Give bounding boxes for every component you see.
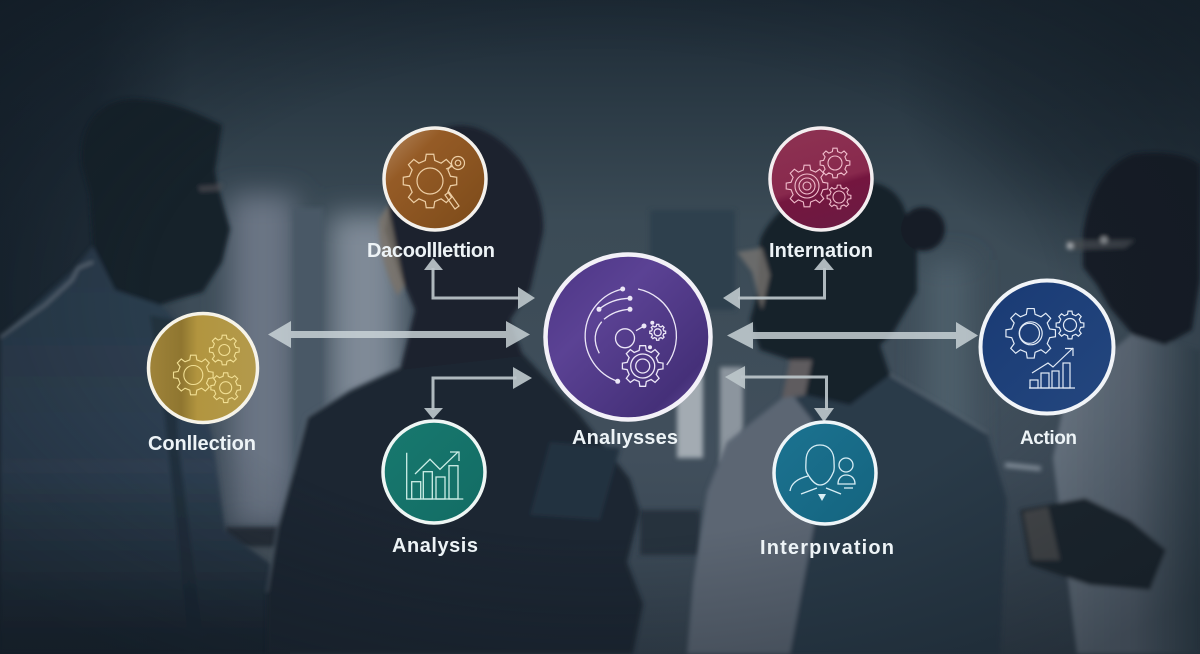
icon: three gold gears xyxy=(174,335,241,403)
label: action: Action xyxy=(1020,428,1077,449)
arrow: elbow between data collection and analyses xyxy=(424,258,535,309)
node: data collection (orange) xyxy=(384,128,486,230)
arrow: elbow between analysis and analyses xyxy=(424,367,532,419)
icon: three gears xyxy=(786,148,851,209)
person 3 silhouette xyxy=(687,181,1007,654)
node: internation (crimson) xyxy=(770,128,872,230)
arrow: long double arrow right of centre xyxy=(727,322,978,349)
label: internation: Internation xyxy=(769,240,873,262)
label: analyses: Analıysses xyxy=(572,427,678,449)
person 1 silhouette xyxy=(0,99,272,654)
icon: cycle arcs with gears xyxy=(585,286,676,386)
arrow: elbow between internation and analyses xyxy=(723,258,834,309)
label: analysis: Analysis xyxy=(392,535,478,557)
label: interpretation: Interpıvation xyxy=(760,537,894,559)
arrow: long double arrow left of centre xyxy=(268,321,530,348)
label: collection: Conllection xyxy=(148,433,256,455)
node: analysis (teal) xyxy=(383,421,485,523)
arrow: elbow between interpretation and analyses xyxy=(725,366,834,422)
icon: gears and growth chart xyxy=(1006,309,1084,388)
icon: people outline xyxy=(790,445,855,501)
node: action (navy) xyxy=(980,280,1114,414)
node: collection (gold) xyxy=(148,314,258,422)
person 2 silhouette xyxy=(267,125,643,654)
node: central analyses (purple) xyxy=(546,254,710,420)
icon: bar chart with rising arrow xyxy=(407,452,463,499)
person 1 lower shadow xyxy=(0,570,290,654)
node: interpretation (blue) xyxy=(774,422,876,524)
person 4 silhouette xyxy=(1020,153,1200,654)
label: data collection: Dacoolllettion xyxy=(367,240,495,262)
icon: gear with magnifier xyxy=(403,154,464,209)
